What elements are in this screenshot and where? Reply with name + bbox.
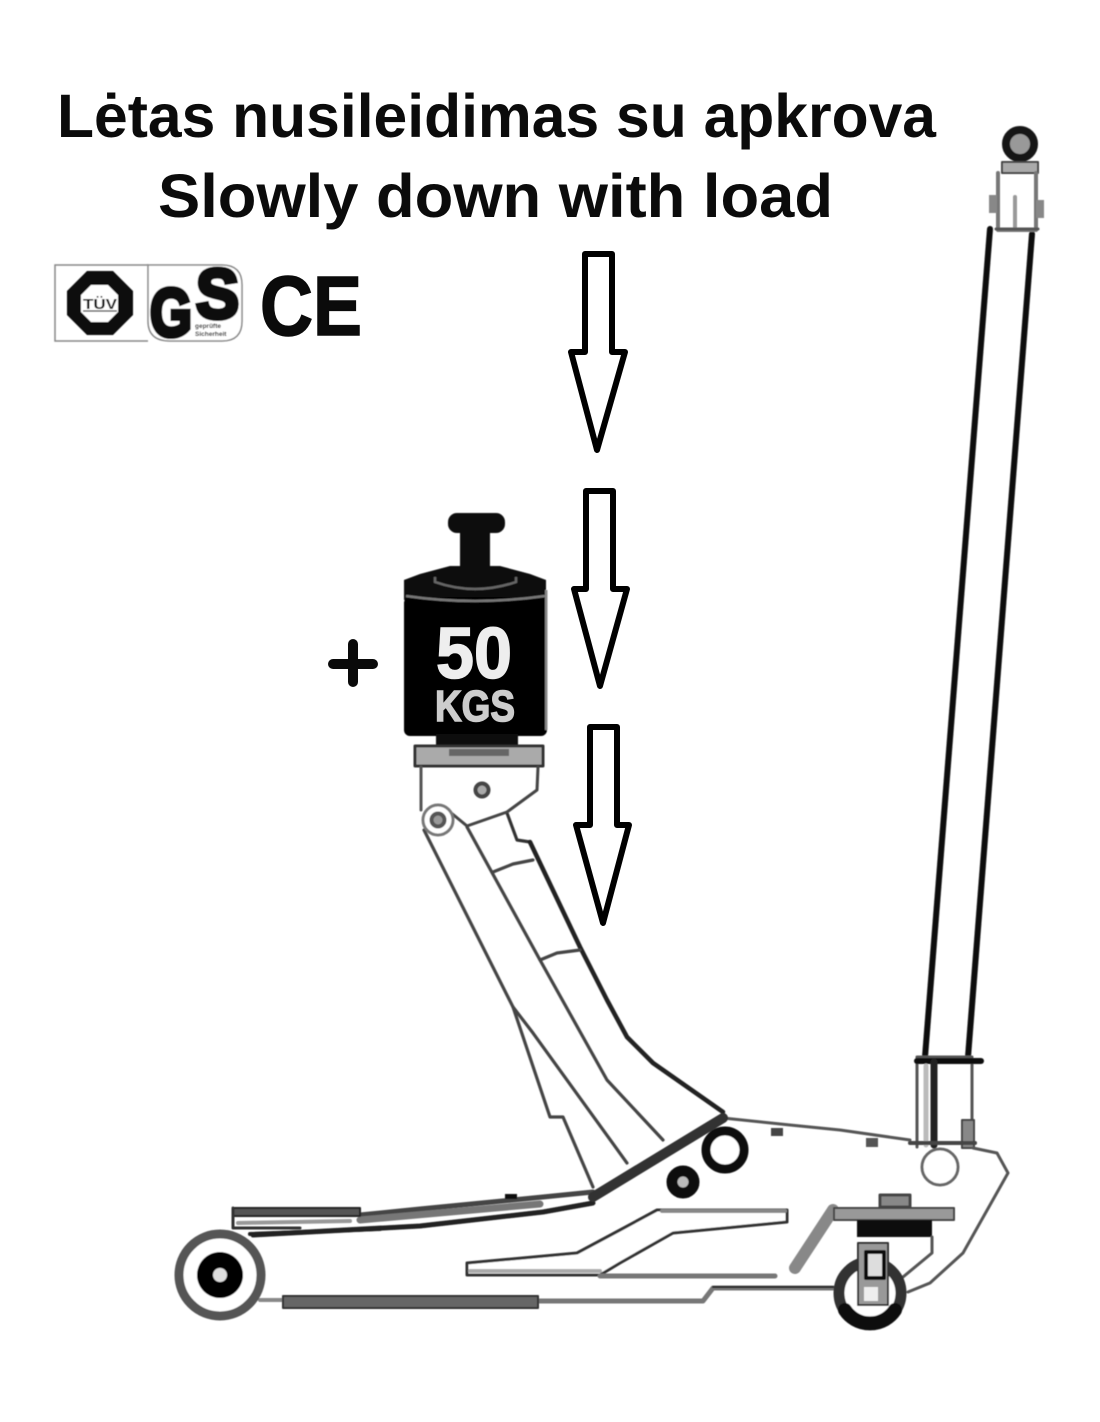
arrow: top	[571, 254, 625, 450]
arrow: bottom	[576, 727, 629, 923]
saddle	[415, 746, 543, 835]
icon: 50 KGS weight	[404, 513, 548, 748]
handle socket	[910, 1057, 981, 1148]
icon: GS mark: S	[196, 255, 239, 333]
icon: 50 KGS weight: KGS	[435, 682, 515, 731]
icon: TÜV mark: TÜV	[83, 296, 117, 313]
lift arm	[424, 813, 723, 1187]
icon: GS mark	[148, 255, 242, 351]
icon: GS mark: geprüfte	[195, 323, 221, 330]
icon: GS mark: Sicherheit	[195, 331, 227, 338]
rear caster	[795, 1195, 954, 1324]
handle	[925, 130, 1044, 1057]
title: Slowly down with load	[158, 162, 833, 230]
title	[57, 82, 937, 230]
icon: TÜV mark	[55, 265, 148, 341]
illustration: floor jack	[179, 130, 1044, 1324]
CE mark: CE	[260, 259, 362, 353]
arrow: middle	[574, 491, 627, 686]
jack frame	[233, 1118, 1008, 1308]
title: Lėtas nusileidimas su apkrova	[57, 82, 937, 150]
icon: 50 KGS weight: 50	[436, 614, 512, 694]
plus sign	[333, 644, 373, 682]
icon: GS mark: G	[150, 275, 192, 351]
front roller	[179, 1234, 261, 1316]
certification marks	[55, 255, 362, 353]
